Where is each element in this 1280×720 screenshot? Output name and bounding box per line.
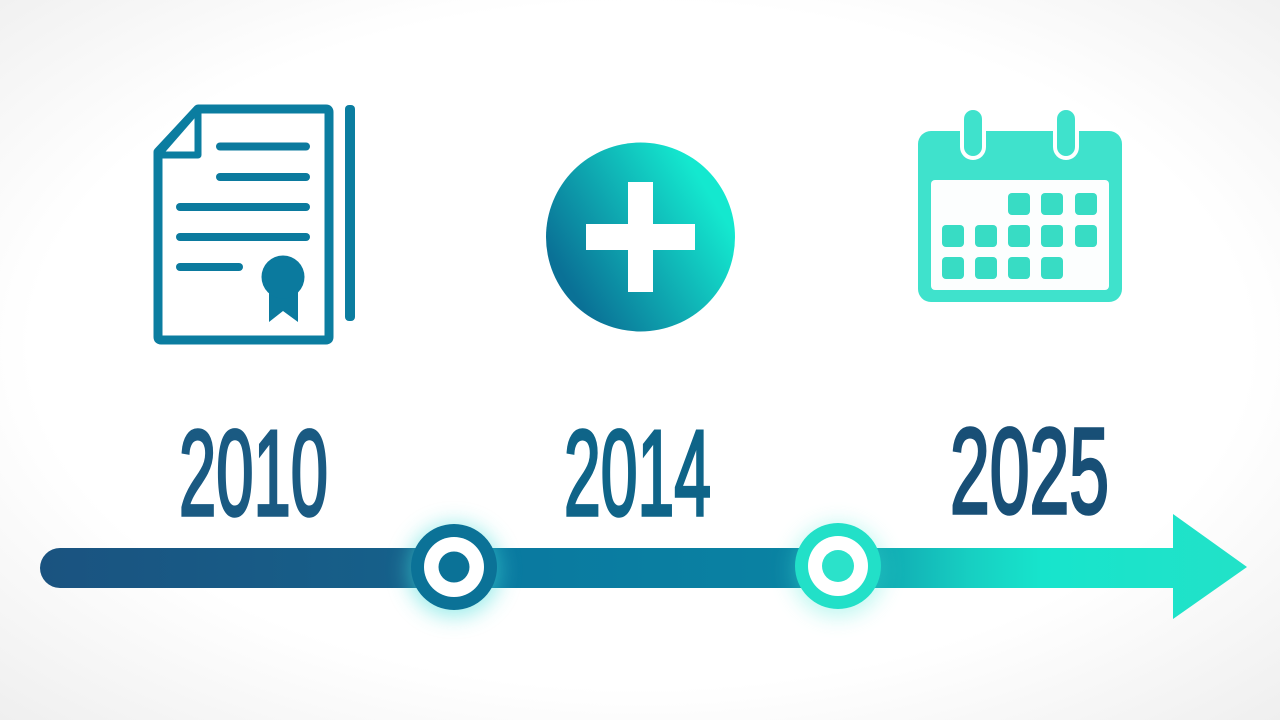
timeline arrow bbox=[40, 514, 1247, 619]
year: 2010: 2010 bbox=[179, 405, 328, 541]
year: 2014: 2014 bbox=[564, 405, 711, 541]
icon: certificate document bbox=[158, 105, 355, 340]
icon: certificate seal bbox=[262, 256, 304, 322]
icon: calendar bbox=[918, 108, 1122, 302]
timeline node: 2014 to 2025 bbox=[792, 523, 884, 616]
year: 2025: 2025 bbox=[950, 403, 1109, 539]
timeline node: 2010 to 2014 bbox=[408, 524, 500, 616]
icon: medical plus circle bbox=[546, 142, 735, 332]
